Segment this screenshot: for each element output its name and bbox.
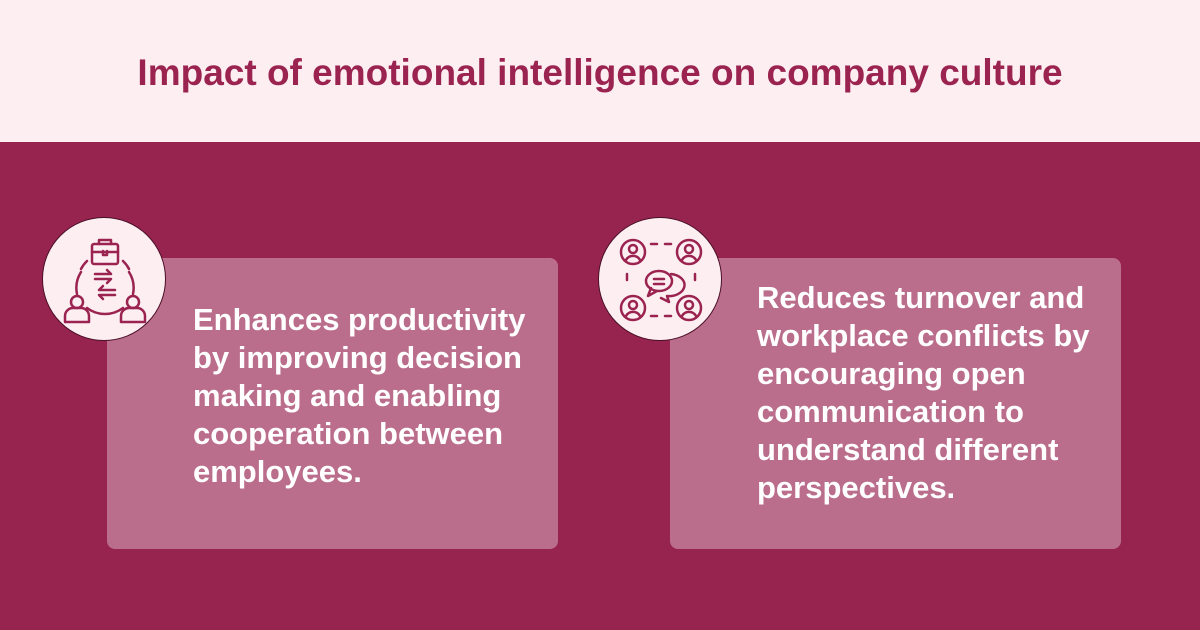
card 2 text: perspectives. <box>757 470 955 505</box>
icon: teamwork <box>42 217 166 341</box>
card 2 text: workplace conflicts by <box>757 318 1090 353</box>
card 2 <box>670 258 1121 549</box>
header band <box>0 0 1200 142</box>
card 2 text: encouraging open <box>757 356 1026 391</box>
icon: communication <box>598 217 722 341</box>
card 1 text <box>193 302 526 489</box>
card 1 text: cooperation between <box>193 416 503 451</box>
card 1 <box>107 258 558 549</box>
card 1 text: making and enabling <box>193 378 501 413</box>
card 2 text: communication to <box>757 394 1024 429</box>
card 1 text: Enhances productivity <box>193 302 525 337</box>
title: Impact of emotional intelligence on company culture <box>137 52 1063 93</box>
card 2 text <box>756 280 1090 505</box>
card 2 text: Reduces turnover and <box>757 280 1084 315</box>
card 2 text: understand different <box>757 432 1058 467</box>
card 1 text: by improving decision <box>193 340 522 375</box>
card 1 text: employees. <box>193 454 362 489</box>
